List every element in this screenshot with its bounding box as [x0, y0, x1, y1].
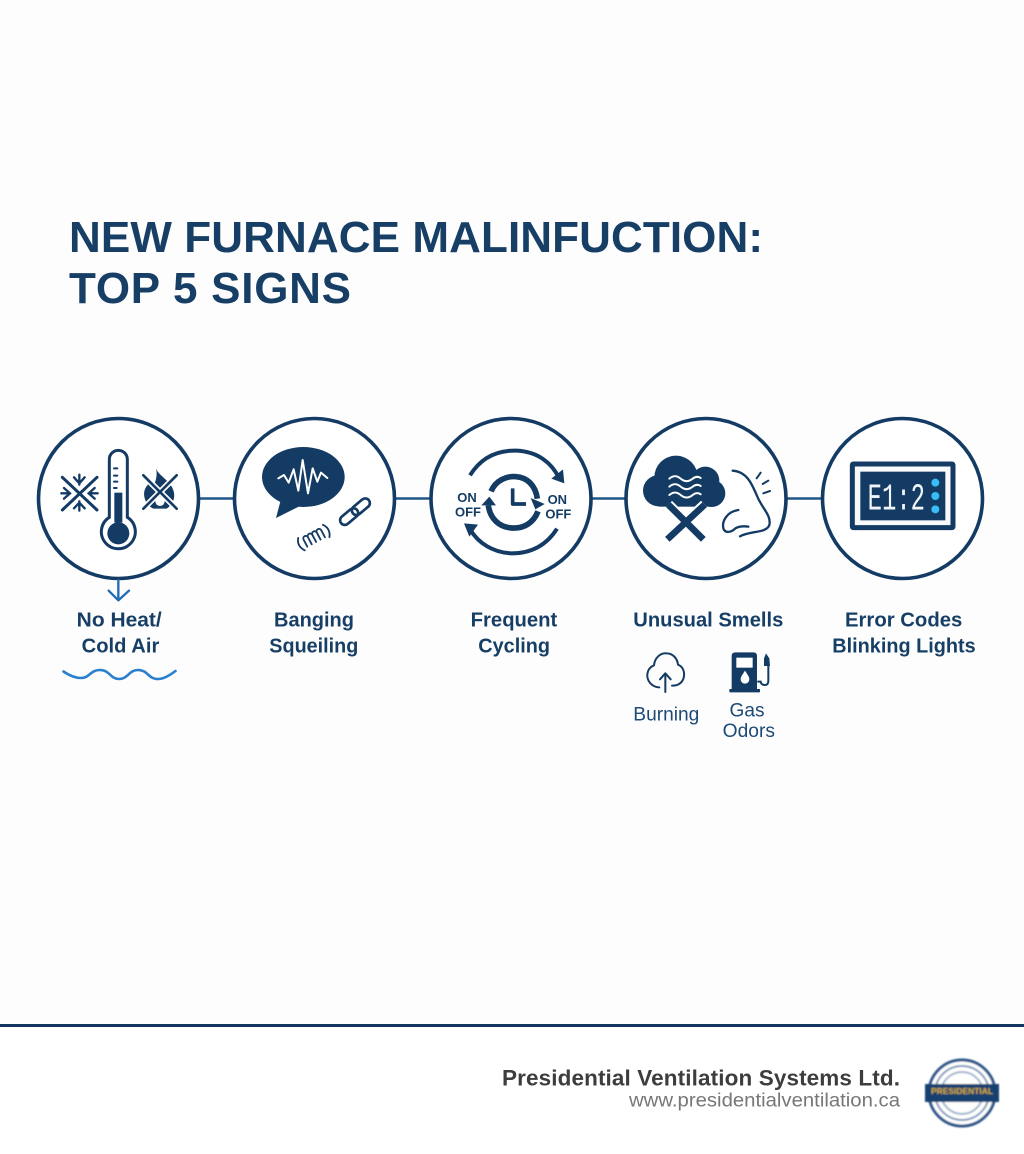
- icon: cloud with waves: [643, 456, 725, 507]
- icon: snowflake crossed: [61, 475, 98, 511]
- icon: speech bubble with sound wave: [262, 447, 345, 518]
- outer arrow: top: [470, 451, 564, 483]
- outer arrow: bottom: [464, 523, 557, 553]
- wave decoration: [64, 670, 176, 679]
- label: gas odors: Odors: [723, 721, 775, 742]
- panel: error codes: [822, 418, 982, 658]
- panel: banging squealing: [234, 418, 394, 658]
- indicator lights: [931, 479, 939, 513]
- icon: cross: [667, 505, 705, 539]
- label: burning: Burning: [633, 705, 699, 726]
- icon: thermometer, snowflake and crossed flame: [61, 450, 177, 549]
- label: no heat / cold air: No Heat/: [77, 610, 162, 632]
- title: TOP 5 SIGNS: [69, 264, 351, 313]
- icon: smoke cloud, cross and nose: [643, 456, 770, 539]
- label: banging squeiling: Banging: [274, 610, 354, 632]
- circle 4: [626, 418, 786, 578]
- label: banging squeiling: [269, 610, 358, 658]
- label: error codes blinking lights: [832, 610, 976, 658]
- company name: Presidential Ventilation Systems Ltd.: [502, 1066, 900, 1090]
- sub-item: gas odors: [723, 652, 775, 742]
- title: [69, 213, 763, 313]
- icon: nose with smell ticks: [723, 471, 770, 536]
- panel: no heat / cold air: [38, 418, 198, 679]
- label: error codes blinking lights: Blinking Lights: [832, 636, 976, 658]
- on/off labels: OFF: [455, 505, 481, 520]
- label: frequent cycling: [471, 610, 558, 658]
- circle 5: [822, 418, 982, 578]
- logo: [925, 1060, 999, 1126]
- label: error codes blinking lights: Error Codes: [845, 610, 962, 632]
- logo: PRESIDENTIAL: [931, 1086, 993, 1096]
- icon: thermometer: [101, 450, 135, 549]
- icon: flame crossed: [143, 468, 177, 509]
- icon: spring: [296, 524, 332, 551]
- clock: [481, 477, 545, 528]
- circle 2: [234, 418, 394, 578]
- label: banging squeiling: Squeiling: [269, 636, 358, 658]
- on/off labels: ON: [548, 492, 567, 507]
- label: frequent cycling: Cycling: [478, 636, 550, 658]
- label: unusual smells: Unusual Smells: [633, 610, 783, 632]
- arrow: down: [109, 580, 129, 600]
- label: gas odors: Gas: [730, 701, 764, 722]
- on/off labels: [455, 490, 571, 521]
- on/off labels: OFF: [545, 506, 571, 521]
- label: frequent cycling: Frequent: [471, 610, 558, 632]
- icon: clock with cycling arrows: [455, 451, 571, 553]
- footer: [0, 1024, 1024, 1154]
- icon: gas pump: [729, 652, 770, 692]
- panel: unusual smells: [626, 418, 786, 742]
- icon: speech bubble, spring and chain: [262, 447, 372, 551]
- circle 1: [38, 418, 198, 578]
- label: no heat / cold air: Cold Air: [82, 636, 160, 658]
- circle 3: [431, 418, 591, 578]
- icon: error code display: [852, 464, 953, 528]
- display text: E1:2: [868, 478, 925, 521]
- label: gas odors: [723, 701, 775, 742]
- icon: chain link: [338, 497, 372, 527]
- sub-item: burning: [633, 653, 699, 726]
- website: www.presidentialventilation.ca: [628, 1090, 900, 1112]
- title: NEW FURNACE MALINFUCTION:: [69, 213, 763, 262]
- label: no heat / cold air: [77, 610, 162, 658]
- panel: frequent cycling: [431, 418, 591, 658]
- on/off labels: ON: [457, 490, 477, 505]
- icon: burning cloud outline: [647, 653, 684, 692]
- connector lines: [199, 497, 822, 500]
